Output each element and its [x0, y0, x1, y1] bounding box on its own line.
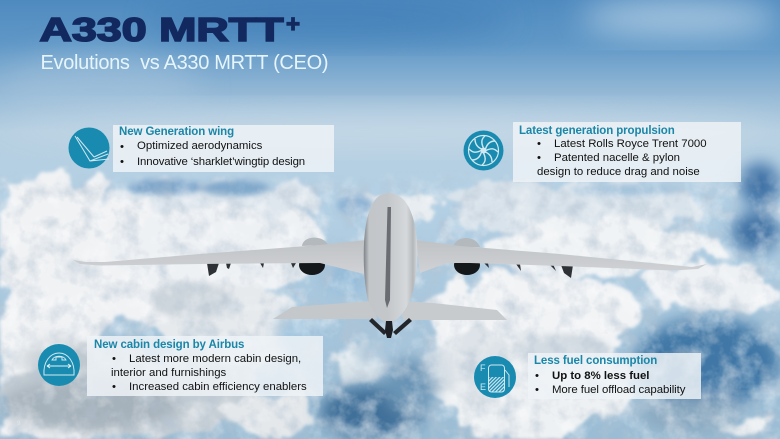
left engine: [299, 255, 325, 275]
text box: [513, 122, 741, 182]
icon: fuel gauge and pump: F: [480, 363, 486, 373]
left tailplane: [273, 301, 377, 319]
icon: fuel gauge and pump: [474, 356, 516, 398]
panel: new cabin design: [38, 336, 323, 396]
text box: New Generation wing: [119, 126, 234, 138]
text box: Latest Rolls Royce Trent 7000: [554, 138, 707, 150]
title: A330 MRTT+ logo wordmark: +: [286, 11, 300, 38]
text box: Patented nacelle & pylon: [554, 152, 680, 164]
right engine: [454, 255, 480, 275]
text box: •: [537, 138, 541, 150]
text box: [528, 353, 701, 399]
text box: interior and furnishings: [111, 367, 226, 379]
panel: new generation wing: [68, 125, 334, 172]
text box: Optimized aerodynamics: [137, 140, 262, 152]
text box: •: [535, 384, 539, 396]
icon: fuel gauge and pump: E: [480, 382, 486, 392]
text box: [87, 336, 323, 396]
left wing: [73, 240, 366, 274]
text box: Increased cabin efficiency enablers: [129, 381, 307, 393]
icon: cabin cross-section: [38, 344, 80, 386]
fuselage: [364, 193, 417, 323]
text box: •: [120, 141, 124, 153]
refuelling pods: [369, 318, 412, 335]
icon: wing: [68, 128, 110, 168]
panel: latest generation propulsion: [464, 122, 741, 182]
right tailplane: [400, 301, 507, 320]
cloud masses: [0, 180, 780, 439]
subtitle: Evolutions vs A330 MRTT (CEO): [40, 52, 328, 74]
page number: 9: [17, 421, 20, 427]
left engine nacelle top: [302, 238, 328, 246]
text box: •: [112, 353, 116, 365]
title: A330 MRTT+ logo wordmark: [39, 11, 300, 48]
flap fairings: [207, 263, 573, 278]
text box: Latest generation propulsion: [519, 125, 675, 137]
text box: [113, 125, 334, 172]
right engine nacelle top: [453, 238, 480, 247]
text box: Latest more modern cabin design,: [129, 353, 301, 365]
fin edge: [385, 207, 391, 308]
text box: New cabin design by Airbus: [94, 339, 244, 351]
centre refuelling unit: [385, 321, 393, 338]
text box: Up to 8% less fuel: [552, 370, 649, 382]
icon: turbofan: [464, 130, 504, 170]
title: A330 MRTT+ logo wordmark: A330 MRTT: [40, 11, 284, 48]
right wing: [416, 240, 707, 273]
text box: design to reduce drag and noise: [537, 166, 700, 178]
text box: •: [535, 370, 539, 382]
text box: •: [112, 381, 116, 393]
text box: •: [537, 152, 541, 164]
cloud shadows and sky gaps: [127, 179, 680, 366]
text box: More fuel offload capability: [552, 384, 685, 396]
text box: Less fuel consumption: [534, 355, 657, 367]
panel: less fuel consumption: [474, 353, 701, 399]
text box: Innovative ‘sharklet’wingtip design: [137, 156, 305, 168]
text box: •: [120, 156, 124, 168]
